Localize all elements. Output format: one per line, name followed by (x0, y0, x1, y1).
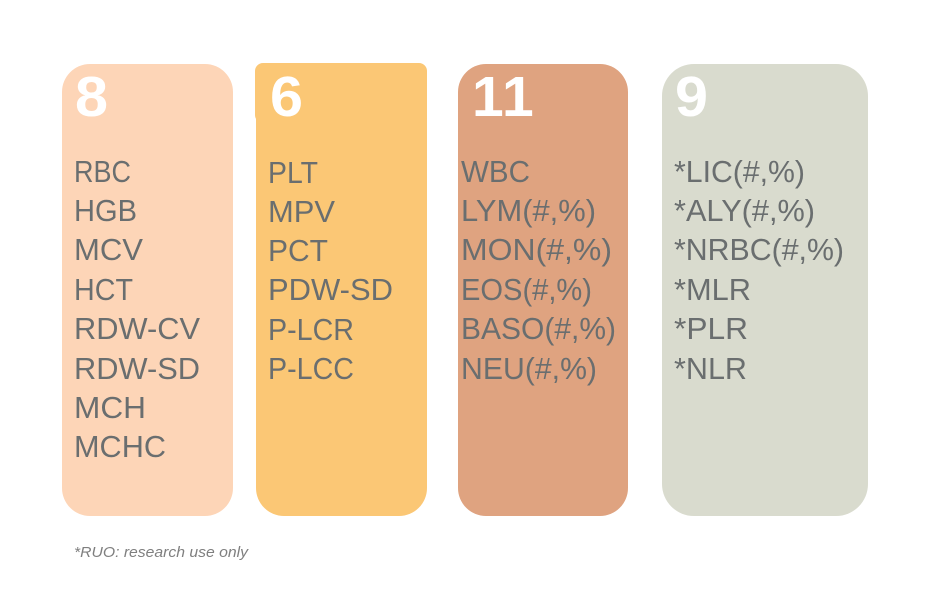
parameter list: platelet: MPV (268, 194, 335, 229)
parameter list: red cell: HGB (74, 193, 137, 228)
parameter list: red cell: MCHC (74, 429, 166, 464)
panel: white cell parameters (458, 64, 628, 516)
parameter list: platelet: P-LCC (268, 351, 354, 386)
count: 9: 9 (675, 65, 708, 129)
count: 6: 6 (270, 65, 303, 129)
parameter list: research use: *PLR (674, 311, 748, 346)
panel: research use parameters (662, 64, 868, 516)
parameter list: red cell: MCV (74, 232, 143, 267)
footnote: *RUO: research use only (74, 544, 250, 561)
parameter list: platelet: PLT (268, 155, 318, 190)
parameter list: platelet (268, 155, 393, 386)
parameter list: white cell: BASO(#,%) (461, 311, 616, 346)
parameter list: white cell: MON(#,%) (461, 232, 612, 267)
panel: platelet parameters (255, 63, 427, 516)
parameter list: red cell: RDW-CV (74, 311, 200, 346)
parameter list: research use: *NLR (674, 351, 747, 386)
count: 8: 8 (75, 65, 108, 129)
parameter list: red cell: RBC (74, 154, 131, 189)
parameter list: platelet: PCT (268, 233, 328, 268)
parameter list: white cell: NEU(#,%) (461, 351, 597, 386)
parameter list: white cell: WBC (461, 154, 530, 189)
parameter list: red cell: MCH (74, 390, 146, 425)
parameter list: white cell: LYM(#,%) (461, 193, 596, 228)
parameter list: red cell: RDW-SD (74, 351, 200, 386)
parameter list: white cell (461, 154, 616, 386)
parameter list: research use: *LIC(#,%) (674, 154, 805, 189)
parameter list: white cell: EOS(#,%) (461, 272, 592, 307)
parameter list: platelet: PDW-SD (268, 272, 393, 307)
panel: red cell parameters (62, 64, 233, 516)
parameter list: red cell: HCT (74, 272, 133, 307)
parameter list: platelet: P-LCR (268, 312, 354, 347)
parameter list: research use: *ALY(#,%) (674, 193, 815, 228)
count: 11: 11 (472, 65, 534, 129)
parameter list: research use (674, 154, 844, 386)
parameter list: red cell (74, 154, 200, 464)
parameter list: research use: *NRBC(#,%) (674, 232, 844, 267)
parameter list: research use: *MLR (674, 272, 751, 307)
